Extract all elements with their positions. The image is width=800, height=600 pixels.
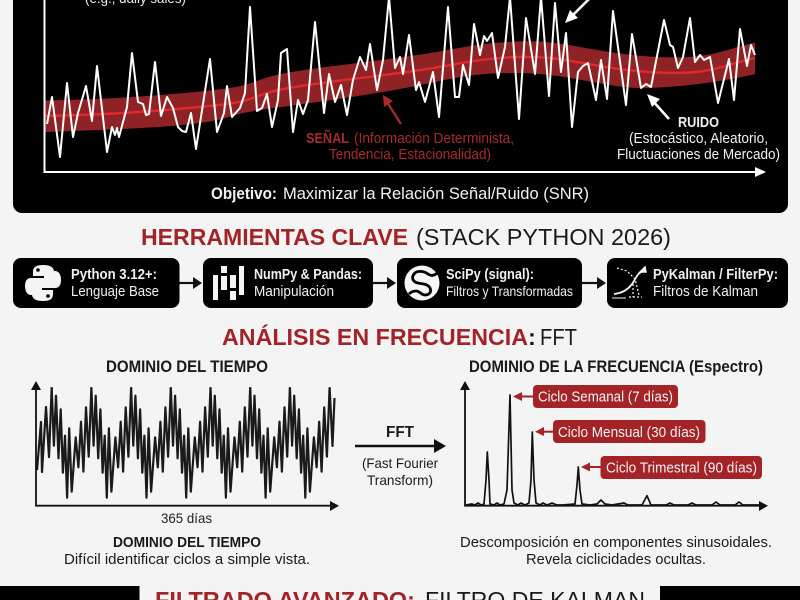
label: noise: RUIDO bbox=[678, 114, 719, 131]
tool text: Python 3.12+: bbox=[71, 267, 157, 283]
tool text: PyKalman / FilterPy: bbox=[653, 267, 778, 283]
heading: frequency analysis: FFT bbox=[540, 324, 577, 350]
icon: scipy bbox=[404, 266, 440, 300]
callout: quarterly cycle: Ciclo Trimestral (90 días) bbox=[606, 460, 757, 476]
tool text bbox=[71, 267, 159, 300]
label: signal bbox=[306, 129, 514, 163]
arrow: noise top pointer bbox=[565, 0, 590, 23]
heading: time domain: DOMINIO DEL TIEMPO bbox=[106, 358, 268, 376]
caption: time domain: Difícil identificar ciclos a simple vista. bbox=[64, 551, 310, 568]
arrow: scipy to kalman bbox=[582, 277, 606, 289]
label: noise: (Estocástico, Aleatorio, bbox=[629, 131, 768, 147]
noisy series bbox=[47, 0, 755, 157]
caption: time domain bbox=[64, 534, 310, 568]
tool text bbox=[653, 267, 778, 300]
arrow: FFT transform: (Fast Fourier bbox=[362, 455, 438, 471]
tool text: SciPy (signal): bbox=[446, 267, 534, 283]
arrow: FFT transform: Transform) bbox=[367, 472, 433, 488]
tool: PyKalman and FilterPy bbox=[607, 258, 788, 308]
panel: time domain bbox=[31, 358, 339, 568]
arrow: FFT transform: FFT bbox=[386, 424, 414, 441]
label: noise: Fluctuaciones de Mercado) bbox=[617, 147, 780, 163]
icon: numpy bars bbox=[213, 266, 244, 300]
caption: frequency domain bbox=[460, 534, 772, 568]
label: signal: SEÑAL bbox=[306, 129, 349, 147]
callout: monthly cycle: Ciclo Mensual (30 días) bbox=[558, 424, 700, 441]
signal band bbox=[45, 41, 755, 132]
label: signal: Tendencia, Estacionalidad) bbox=[329, 147, 491, 163]
tool text: Manipulación bbox=[254, 284, 334, 300]
callout: monthly cycle bbox=[535, 420, 706, 443]
objective statement: Maximizar la Relación Señal/Ruido (SNR) bbox=[283, 184, 589, 203]
arrow: FFT transform bbox=[355, 424, 446, 488]
callout: quarterly cycle bbox=[581, 456, 762, 479]
tool text bbox=[254, 267, 362, 300]
tool text: Filtros y Transformadas bbox=[446, 283, 573, 299]
icon: python bbox=[25, 265, 61, 301]
signal trend line bbox=[45, 57, 755, 116]
tool text: Lenguaje Base bbox=[71, 284, 159, 300]
tool: SciPy bbox=[397, 258, 582, 308]
chart axes bbox=[44, 0, 766, 177]
caption: frequency domain: Descomposición en componentes sinusoidales. bbox=[460, 534, 772, 551]
caption: frequency domain: Revela ciclicidades ocultas. bbox=[526, 551, 706, 568]
callout: weekly cycle bbox=[513, 385, 678, 408]
heading: frequency analysis: ANÁLISIS EN FRECUENCIA bbox=[222, 323, 528, 350]
heading: key tools: HERRAMIENTAS CLAVE bbox=[141, 224, 408, 250]
panel: frequency domain bbox=[460, 358, 772, 568]
arrow: numpy to scipy bbox=[373, 277, 396, 289]
arrow: python to numpy bbox=[179, 277, 202, 289]
axis label: days: 365 días bbox=[161, 510, 212, 526]
heading: Kalman filter bbox=[155, 587, 645, 600]
tool: Python bbox=[13, 258, 180, 308]
label: noise bbox=[617, 114, 780, 163]
panel: signal vs noise bbox=[13, 0, 788, 213]
arrow: signal pointer bbox=[383, 95, 401, 124]
tool text bbox=[446, 267, 573, 299]
caption: time domain: DOMINIO DEL TIEMPO bbox=[113, 534, 261, 551]
tool text: Filtros de Kalman bbox=[653, 284, 758, 300]
tool text: NumPy & Pandas: bbox=[254, 267, 362, 283]
arrow: noise pointer bbox=[647, 94, 669, 119]
heading: frequency analysis: : bbox=[528, 324, 536, 350]
heading: key tools bbox=[141, 224, 671, 250]
heading: key tools: (STACK PYTHON 2026) bbox=[416, 224, 671, 250]
section band: advanced filtering bbox=[0, 586, 800, 600]
icon: kalman curve bbox=[612, 267, 646, 298]
tool: NumPy and Pandas bbox=[203, 258, 373, 308]
label: signal: (Información Determinista, bbox=[354, 131, 514, 147]
chart: spectrum bbox=[460, 381, 768, 511]
objective statement: Objetivo: bbox=[211, 184, 277, 203]
heading: frequency domain: DOMINIO DE LA FRECUENCIA (Espectro) bbox=[469, 358, 763, 376]
chart: time series bbox=[31, 381, 339, 511]
callout: weekly cycle: Ciclo Semanal (7 días) bbox=[538, 388, 673, 406]
